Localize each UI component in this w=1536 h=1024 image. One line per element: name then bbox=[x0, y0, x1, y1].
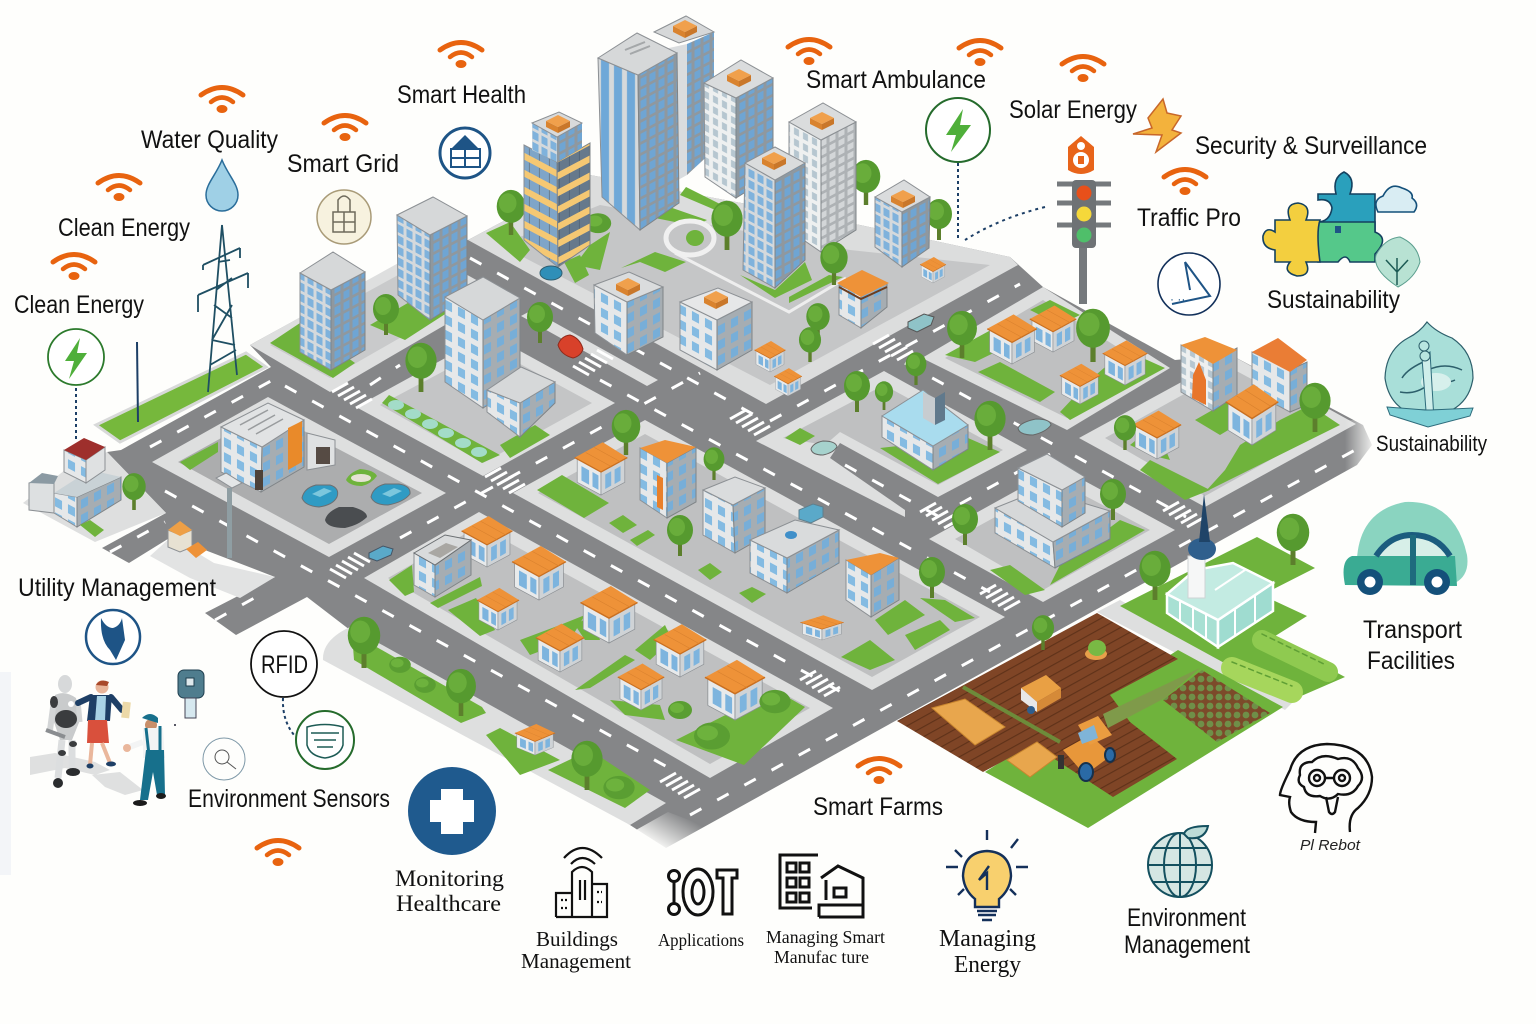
houses: right blocks bbox=[987, 306, 1147, 404]
block: pond bbox=[356, 334, 615, 476]
tower: small blue bbox=[875, 180, 930, 267]
icon: IoT bbox=[668, 869, 737, 915]
houses bbox=[512, 546, 566, 600]
wifi icons bbox=[53, 40, 1206, 866]
tower: big blue bbox=[598, 33, 679, 230]
icon: medical cross bbox=[408, 767, 496, 855]
left edge tint bbox=[0, 672, 11, 875]
plant rows bbox=[1232, 634, 1328, 692]
houses: right block front bbox=[1133, 384, 1278, 459]
front trees bbox=[348, 242, 1331, 799]
tractor bbox=[1058, 716, 1115, 781]
brown field bbox=[897, 613, 1178, 797]
label: Solar Energy: Solar Energy bbox=[1009, 96, 1137, 124]
hay bale large bbox=[932, 699, 1005, 745]
clinic road car bbox=[1018, 419, 1051, 435]
icon: sustainability tree bbox=[1385, 322, 1473, 427]
label: Environment Sensors: Environment Sensors bbox=[188, 785, 390, 813]
label: Smart Grid: Smart Grid bbox=[287, 150, 399, 178]
tower: left 1 bbox=[300, 252, 365, 370]
label: Applications: Applications bbox=[658, 930, 744, 950]
icon: globe bbox=[1148, 826, 1212, 897]
label: Managing Energy: Energy bbox=[954, 952, 1021, 978]
roundabout ramp bbox=[666, 221, 714, 255]
red car bbox=[558, 335, 583, 358]
label: Water Quality: Water Quality bbox=[141, 126, 278, 154]
tower: left 3 bbox=[445, 277, 520, 408]
trees bbox=[122, 160, 952, 510]
icon: smart grid badge bbox=[317, 190, 371, 244]
label: Transport Facilities: Transport bbox=[1363, 616, 1462, 644]
house pair back bbox=[462, 516, 512, 567]
people illustration bbox=[30, 675, 176, 806]
icon: utility badge bbox=[86, 610, 140, 664]
icon: traffic pro badge: · ·· bbox=[1170, 292, 1185, 306]
block: parking bbox=[152, 397, 446, 557]
red roof building bbox=[29, 438, 121, 537]
icon: brain head bbox=[1280, 744, 1372, 833]
block: top-left towers bbox=[250, 250, 500, 392]
small roof shops bbox=[754, 257, 946, 396]
label: Buildings Management: Management bbox=[521, 949, 631, 973]
icon: search badge bbox=[203, 738, 245, 780]
label: Clean Energy lower: Clean Energy bbox=[14, 291, 144, 319]
lot car bbox=[811, 441, 837, 455]
icon: puzzle bbox=[1263, 172, 1382, 276]
grey low house bbox=[414, 535, 471, 597]
block: two-tier bbox=[929, 467, 1175, 602]
road fade bottom bbox=[636, 812, 705, 852]
icon: environment sensor badge bbox=[296, 711, 354, 769]
label: Environment Management: Management bbox=[1124, 931, 1250, 959]
block: middle bbox=[513, 420, 1005, 690]
icon: green bolt top bbox=[926, 98, 1045, 240]
hay bale small bbox=[1007, 742, 1057, 777]
street lamp bbox=[216, 473, 242, 558]
icon: RFID badge bbox=[251, 631, 317, 735]
label: Sustainability upper: Sustainability bbox=[1267, 286, 1400, 314]
greenhouse bbox=[1167, 494, 1273, 647]
median strip bbox=[521, 310, 658, 386]
parked cars bbox=[302, 469, 410, 528]
block: houses bbox=[364, 512, 833, 778]
block: clinic bbox=[756, 371, 1027, 517]
label: Managing Energy: Managing bbox=[939, 926, 1036, 952]
tower: grey bbox=[789, 103, 856, 252]
shadows bbox=[30, 753, 143, 795]
robot bbox=[46, 675, 80, 788]
label: Managing Energy bbox=[939, 926, 1036, 978]
label: Smart Health: Smart Health bbox=[397, 81, 526, 109]
greenhouse sidewalk bbox=[1097, 600, 1295, 710]
city map ground bbox=[23, 175, 1377, 852]
label: Smart Ambulance: Smart Ambulance bbox=[806, 66, 986, 94]
left low block bbox=[23, 452, 166, 542]
mid building 1 bbox=[594, 272, 663, 355]
icon: green bolt left bbox=[48, 329, 104, 440]
buildings: houses block bbox=[414, 516, 765, 720]
bottom strip block bbox=[323, 627, 666, 825]
block: downtown towers bbox=[468, 175, 1018, 404]
icon: traffic light bbox=[1057, 180, 1111, 304]
label: Traffic Pro: Traffic Pro bbox=[1137, 204, 1241, 232]
grey building bbox=[703, 477, 765, 553]
greenhouse lawn bbox=[1120, 537, 1345, 700]
hedge bbox=[1103, 668, 1200, 728]
icon: RFID badge: RFID bbox=[261, 651, 308, 679]
wide building bbox=[750, 520, 839, 593]
icon: leaf tree bbox=[1375, 237, 1420, 287]
icon: sensor device bbox=[178, 670, 204, 718]
buildings: middle block bbox=[575, 440, 899, 640]
icon: orange bolt bbox=[1133, 99, 1181, 152]
tower: yellow bbox=[524, 112, 590, 267]
left grass strip bbox=[96, 353, 266, 442]
icon: smart health badge bbox=[440, 128, 490, 178]
label: Transport Facilities bbox=[1363, 616, 1462, 675]
blue van bbox=[799, 504, 823, 523]
crop pile bbox=[1085, 640, 1107, 660]
farm area bbox=[897, 494, 1345, 828]
mid building 2 bbox=[680, 288, 752, 370]
crosswalks bbox=[330, 335, 1203, 798]
car near crossing bbox=[908, 314, 934, 332]
strip shop bbox=[515, 724, 555, 755]
label: Monitoring Healthcare bbox=[395, 866, 505, 916]
label: Pl Rebot: Pl Rebot bbox=[1300, 837, 1361, 854]
icon: traffic pro badge bbox=[1158, 253, 1220, 315]
label: Buildings Management: Buildings bbox=[536, 927, 618, 951]
right tall buildings bbox=[1181, 337, 1307, 412]
vegetable patch bbox=[1163, 670, 1270, 742]
icon: water drop bbox=[206, 160, 238, 211]
pavement by lamp bbox=[150, 537, 275, 598]
worker bbox=[123, 714, 166, 806]
road dashes bbox=[110, 258, 1355, 815]
label: Environment Management: Environment bbox=[1127, 904, 1246, 932]
label: Sustainability lower: Sustainability bbox=[1376, 431, 1487, 456]
label: Monitoring Healthcare: Healthcare bbox=[396, 891, 501, 916]
small road car bbox=[369, 546, 393, 561]
shop building bbox=[837, 270, 889, 328]
label: Managing Smart Manufacture bbox=[766, 927, 885, 967]
label: Security and Surveillance: Security & Surveillance bbox=[1195, 132, 1427, 160]
label: Managing Smart Manufacture: Manufac ture bbox=[774, 947, 869, 967]
icon: pylon bbox=[198, 225, 248, 392]
field lawn bbox=[985, 650, 1283, 828]
icon: cloud bbox=[1376, 186, 1417, 212]
label: Buildings Management bbox=[521, 927, 631, 973]
label: Clean Energy upper: Clean Energy bbox=[58, 214, 190, 242]
icon: manufacture bbox=[780, 855, 863, 917]
pole bbox=[137, 342, 138, 422]
parked van bbox=[800, 615, 844, 640]
label: Utility Management: Utility Management bbox=[18, 574, 216, 602]
low building beside tower bbox=[487, 367, 555, 437]
label: Monitoring Healthcare: Monitoring bbox=[395, 866, 505, 891]
tower: grey-white bbox=[704, 60, 773, 198]
road network bbox=[102, 175, 1372, 848]
house m1 bbox=[575, 442, 627, 495]
icon: lock bbox=[1068, 136, 1094, 174]
label: Transport Facilities: Facilities bbox=[1367, 647, 1455, 675]
icon: light bulb bbox=[946, 830, 1028, 920]
parking building bbox=[221, 403, 335, 492]
woman bbox=[78, 680, 131, 768]
tower: behind narrow bbox=[654, 16, 714, 190]
label: Managing Smart Manufacture: Managing Smart bbox=[766, 927, 885, 947]
tower: front blue bbox=[743, 147, 805, 288]
truck bbox=[1021, 675, 1061, 714]
icon: smart building bbox=[556, 848, 607, 917]
tall orange building bbox=[640, 440, 696, 518]
building: two-tier bbox=[995, 454, 1110, 568]
van bbox=[168, 521, 207, 558]
small dot bbox=[174, 724, 176, 726]
tower: left 2 bbox=[397, 197, 467, 320]
label: Smart Farms: Smart Farms bbox=[813, 793, 943, 821]
building: clinic bbox=[882, 390, 968, 470]
road fade right bbox=[1345, 420, 1377, 472]
field divider bbox=[963, 687, 1060, 742]
blue car on road bbox=[540, 266, 562, 280]
label: Environment Management bbox=[1124, 904, 1250, 959]
icon: car bbox=[1344, 502, 1468, 595]
block: orange houses bbox=[922, 287, 1170, 430]
orange building bbox=[846, 553, 899, 617]
block: right orange bbox=[1079, 355, 1356, 507]
